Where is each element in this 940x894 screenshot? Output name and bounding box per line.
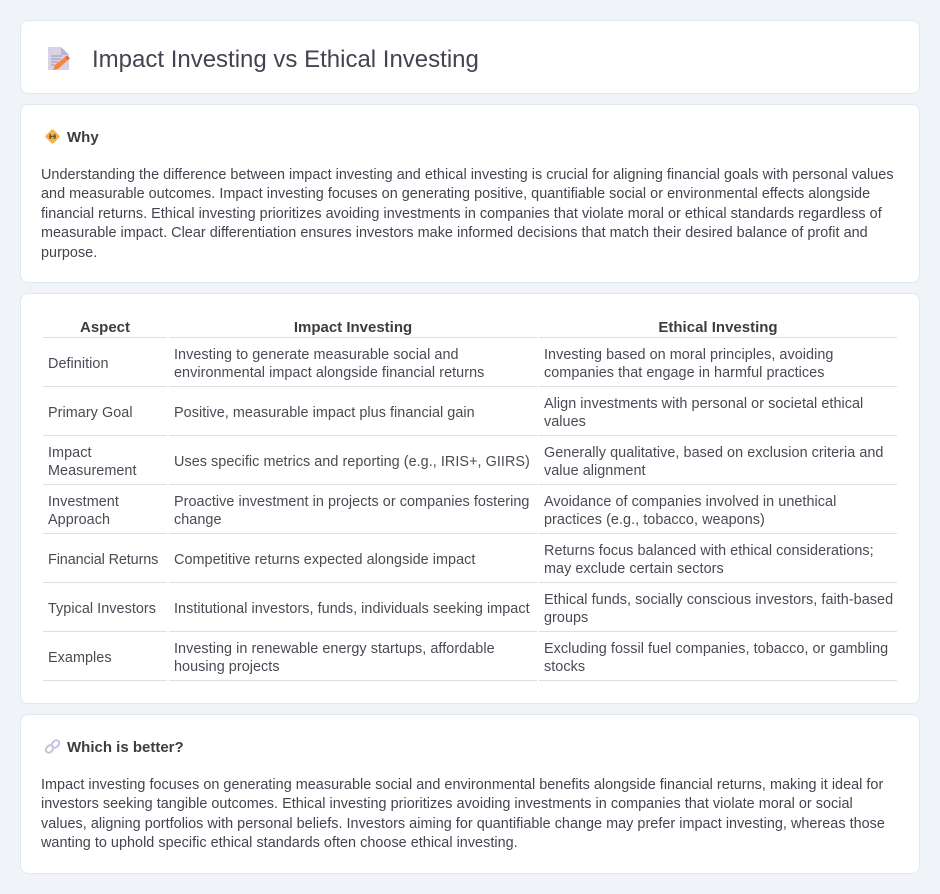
row: definition [48, 347, 833, 381]
row: financial returns [48, 543, 874, 577]
panel: comparison table [20, 293, 920, 704]
icon: document with pencil [48, 47, 70, 70]
text: Impact investing focuses on generating measurable social and environmental benefits alongside financial returns, making it ideal for [41, 777, 883, 793]
text: Impact [48, 445, 92, 461]
text: companies that engage in harmful practices [544, 365, 824, 381]
text: may exclude certain sectors [544, 561, 724, 577]
text: Examples [48, 650, 112, 666]
text: purpose. [41, 245, 97, 261]
text: Measurement [48, 463, 137, 479]
text: values [544, 414, 586, 430]
text: Generally qualitative, based on exclusion criteria and [544, 445, 883, 461]
text: measurable impact. Clear differentiation ensures investors make informed decisions that match their desired balance of profit and [41, 225, 868, 241]
text: Proactive investment in projects or companies fostering [174, 494, 529, 510]
text: Understanding the difference between impact investing and ethical investing is crucial for aligning financial goals with personal values [41, 167, 894, 183]
row: primary goal [48, 396, 863, 430]
text: Definition [48, 356, 108, 372]
text: investors seeking tangible outcomes. Ethical investing prioritizes avoiding investments in companies that violate moral or social [41, 796, 853, 812]
text: groups [544, 610, 588, 626]
text: Excluding fossil fuel companies, tobacco, or gambling [544, 641, 888, 657]
table header: impact investing: Impact Investing [294, 319, 412, 336]
header card [20, 20, 920, 94]
text: environmental impact alongside financial returns [174, 365, 484, 381]
text: stocks [544, 659, 585, 675]
text: Returns focus balanced with ethical considerations; [544, 543, 874, 559]
icon: chain link [44, 739, 60, 754]
text: financial returns. Ethical investing prioritizes avoiding investments in companies that violate moral or ethical standards regardless of [41, 206, 882, 222]
text: Primary Goal [48, 405, 133, 421]
text: value alignment [544, 463, 646, 479]
text: Investing to generate measurable social and [174, 347, 459, 363]
title: Impact Investing vs Ethical Investing [92, 46, 479, 73]
heading: which is better: Which is better? [67, 739, 184, 756]
text: Align investments with personal or societal ethical [544, 396, 863, 412]
text: and measurable outcomes. Impact investing focuses on generating positive, quantifiable social or environmental effects alongside [41, 186, 870, 202]
heading: why: Why [67, 129, 99, 146]
table header: aspect: Aspect [80, 319, 130, 336]
text: housing projects [174, 659, 280, 675]
panel: which is better [20, 714, 920, 874]
text: Typical Investors [48, 601, 156, 617]
text: Positive, measurable impact plus financial gain [174, 405, 475, 421]
text: Institutional investors, funds, individuals seeking impact [174, 601, 530, 617]
row: examples [48, 641, 888, 675]
text: change [174, 512, 222, 528]
text: Investing based on moral principles, avoiding [544, 347, 833, 363]
table header: ethical investing: Ethical Investing [658, 319, 778, 336]
text: Uses specific metrics and reporting (e.g., IRIS+, GIIRS) [174, 454, 530, 470]
text: why paragraph [41, 167, 894, 261]
text: values, aligning portfolios with personal beliefs. Investors aiming for quantifiable change may prefer impact investing, whereas those [41, 816, 885, 832]
row: investment approach [48, 494, 836, 528]
icon: warning diamond [45, 129, 60, 144]
text: Financial Returns [48, 552, 158, 568]
row: typical investors [48, 592, 893, 626]
text: which is better paragraph [41, 777, 885, 851]
text: practices (e.g., tobacco, weapons) [544, 512, 765, 528]
text: Investment [48, 494, 119, 510]
text: Investing in renewable energy startups, affordable [174, 641, 495, 657]
text: Competitive returns expected alongside impact [174, 552, 475, 568]
panel: why [20, 104, 920, 283]
text: Ethical funds, socially conscious investors, faith-based [544, 592, 893, 608]
text: Avoidance of companies involved in unethical [544, 494, 836, 510]
row: impact measurement [48, 445, 883, 479]
text: Approach [48, 512, 110, 528]
text: wanting to uphold specific ethical standards often choose ethical investing. [41, 835, 518, 851]
